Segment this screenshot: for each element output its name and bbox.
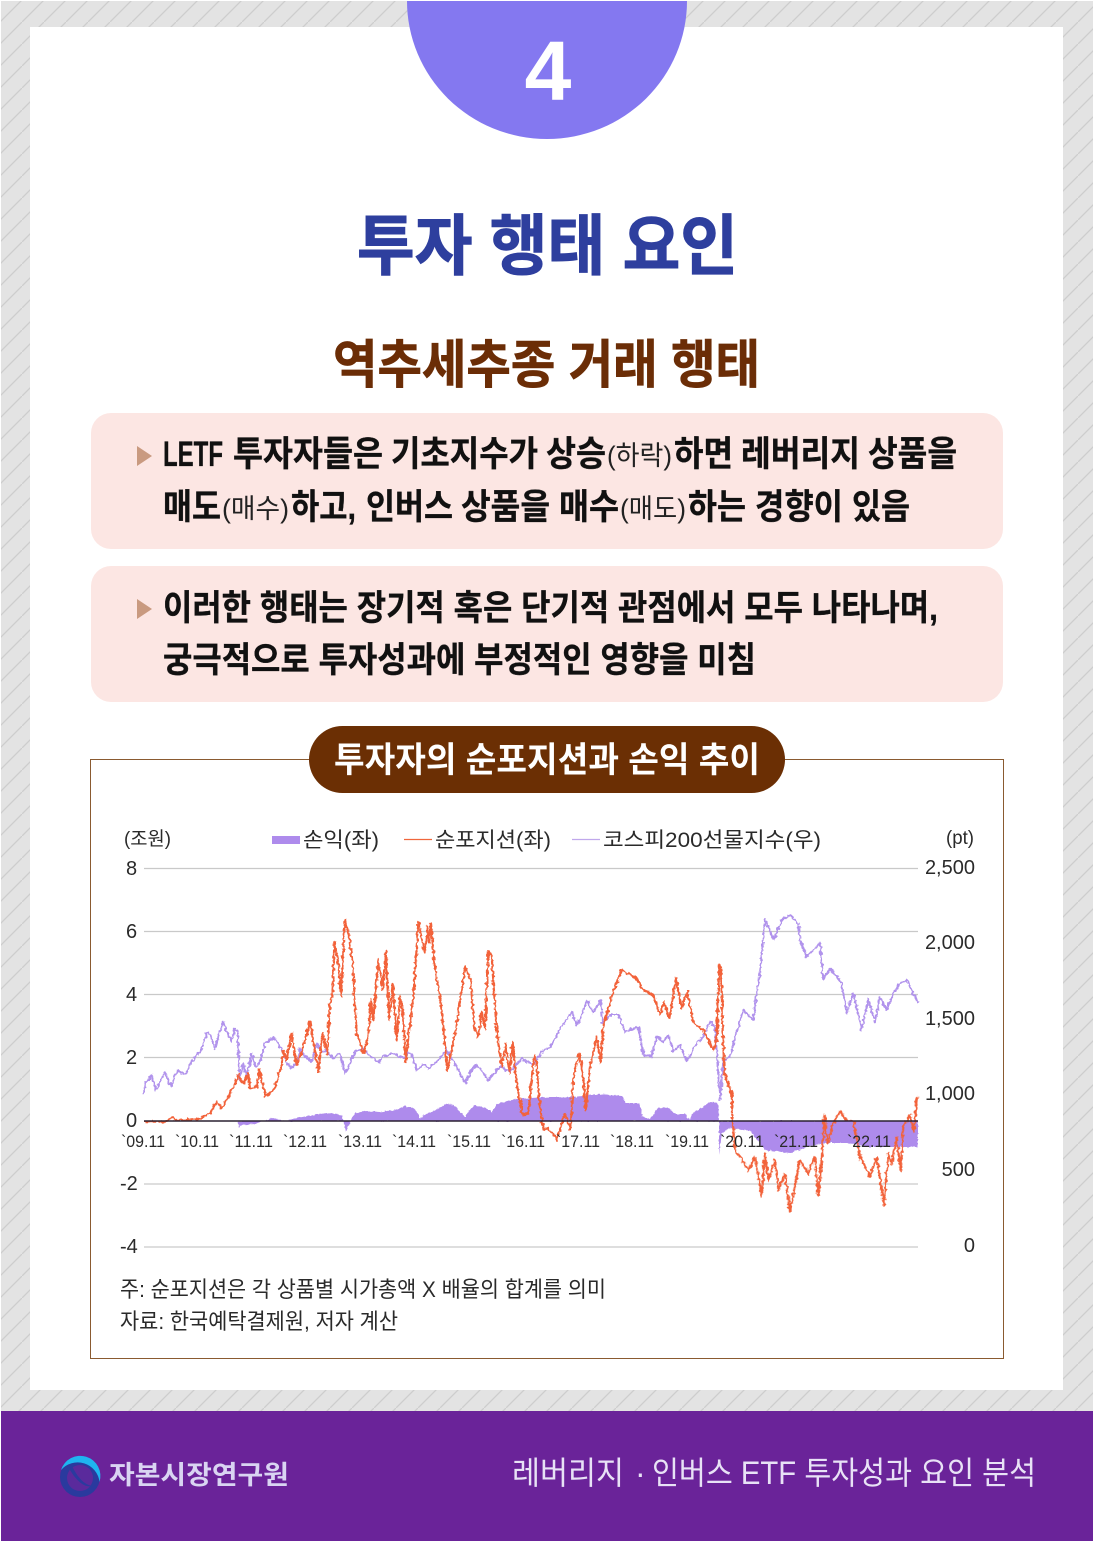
legend: (조원) [124, 828, 171, 850]
chart: net position and profit [144, 868, 918, 1247]
footer report title: 인버스 ETF 투자성과 요인 분석 [652, 1455, 1036, 1491]
x axis labels: `14.11 [392, 1132, 436, 1151]
left axis labels: -2 [120, 1173, 138, 1195]
chart heading pill: 투자자의 순포지션과 손익 추이 [334, 741, 760, 780]
statement line 2: 하고, [291, 488, 356, 527]
x axis labels: `19.11 [665, 1132, 709, 1151]
left axis labels: -4 [120, 1236, 138, 1258]
statement line 2: 있음 [852, 488, 910, 527]
icon: bullet triangle [137, 446, 152, 466]
panel: first statement [91, 413, 1003, 549]
left axis labels: 2 [126, 1047, 137, 1069]
left axis labels: 6 [126, 921, 137, 943]
line: KOSPI200 futures index [144, 915, 918, 1100]
chart source: 자료: 한국예탁결제원, 저자 계산 [120, 1309, 398, 1334]
x axis labels: `20.11 [720, 1132, 764, 1151]
right axis labels [925, 857, 975, 1257]
legend: 손익(좌) [303, 829, 379, 852]
x axis labels [121, 1132, 891, 1151]
right axis labels: 2,500 [925, 857, 975, 879]
title: 투자 행태 요인 [357, 209, 738, 283]
x axis labels: `11.11 [229, 1132, 273, 1151]
statement line 2 [163, 488, 910, 527]
statement line 2: 인버스 [366, 488, 453, 527]
x axis labels: `22.11 [847, 1132, 891, 1151]
footer band [1, 1411, 1093, 1541]
left axis labels: 0 [126, 1110, 137, 1132]
x axis labels: `17.11 [556, 1132, 600, 1151]
statement line 3: 이러한 행태는 장기적 혹은 단기적 관점에서 모두 나타나며, [163, 589, 938, 628]
x axis labels: `10.11 [175, 1132, 219, 1151]
x axis labels: `13.11 [338, 1132, 382, 1151]
footer report title: · [635, 1455, 646, 1491]
legend: 순포지션(좌) [435, 829, 551, 852]
statement line 4: 궁극적으로 투자성과에 부정적인 영향을 미침 [163, 641, 756, 680]
statement line 1: 레버리지 [741, 435, 860, 474]
line: net position [144, 920, 918, 1212]
footer report title [512, 1455, 1036, 1491]
left axis labels [120, 858, 138, 1258]
statement line 1: 하면 [674, 435, 733, 474]
statement line 2: (매수) [222, 494, 289, 524]
footer report title: 레버리지 [512, 1455, 624, 1491]
statement line 1: 기초지수가 [391, 435, 538, 474]
left axis labels: 8 [126, 858, 137, 880]
right axis labels: 1,000 [925, 1083, 975, 1105]
icon: institute logo [60, 1456, 100, 1497]
section number badge: 4 [525, 24, 572, 118]
chart heading pill [309, 726, 785, 793]
x axis labels: `09.11 [121, 1132, 165, 1151]
statement line 2: 상품을 [461, 488, 550, 527]
statement line 2: 매수 [559, 488, 619, 527]
x axis labels: `16.11 [501, 1132, 545, 1151]
statement line 2: 경향이 [755, 488, 843, 527]
panel: chart frame [90, 760, 1004, 1358]
legend: (pt) [946, 828, 974, 849]
x axis labels: `15.11 [447, 1132, 491, 1151]
statement line 1: 상승 [546, 435, 606, 474]
right axis labels: 1,500 [925, 1008, 975, 1030]
subheading: 역추세추종 거래 행태 [333, 337, 760, 395]
panel: second statement [91, 566, 1003, 702]
icon: bullet triangle [137, 599, 152, 619]
footer institute name: 자본시장연구원 [109, 1460, 289, 1490]
legend: 코스피200선물지수(우) [603, 829, 821, 852]
statement line 2: (매도) [620, 494, 686, 524]
statement line 1: (하락) [607, 441, 672, 471]
statement line 1: 상품을 [868, 435, 957, 474]
chart footnote: 주: 순포지션은 각 상품별 시가총액 X 배율의 합계를 의미 [120, 1277, 606, 1302]
statement line 2: 매도 [163, 488, 221, 527]
section number badge [407, 1, 687, 139]
left axis labels: 4 [126, 984, 137, 1006]
statement line 1: LETF [163, 435, 223, 474]
statement line 2: 하는 [688, 488, 746, 527]
area: profit and loss [238, 1094, 918, 1155]
right axis labels: 0 [964, 1235, 975, 1257]
right axis labels: 500 [942, 1159, 975, 1181]
statement line 1 [163, 435, 957, 474]
x axis labels: `18.11 [610, 1132, 654, 1151]
legend [124, 828, 974, 852]
statement line 1: 투자자들은 [233, 435, 383, 474]
right axis labels: 2,000 [925, 932, 975, 954]
x axis labels: `21.11 [774, 1132, 818, 1151]
zero axis [144, 1120, 918, 1122]
x axis labels: `12.11 [283, 1132, 327, 1151]
